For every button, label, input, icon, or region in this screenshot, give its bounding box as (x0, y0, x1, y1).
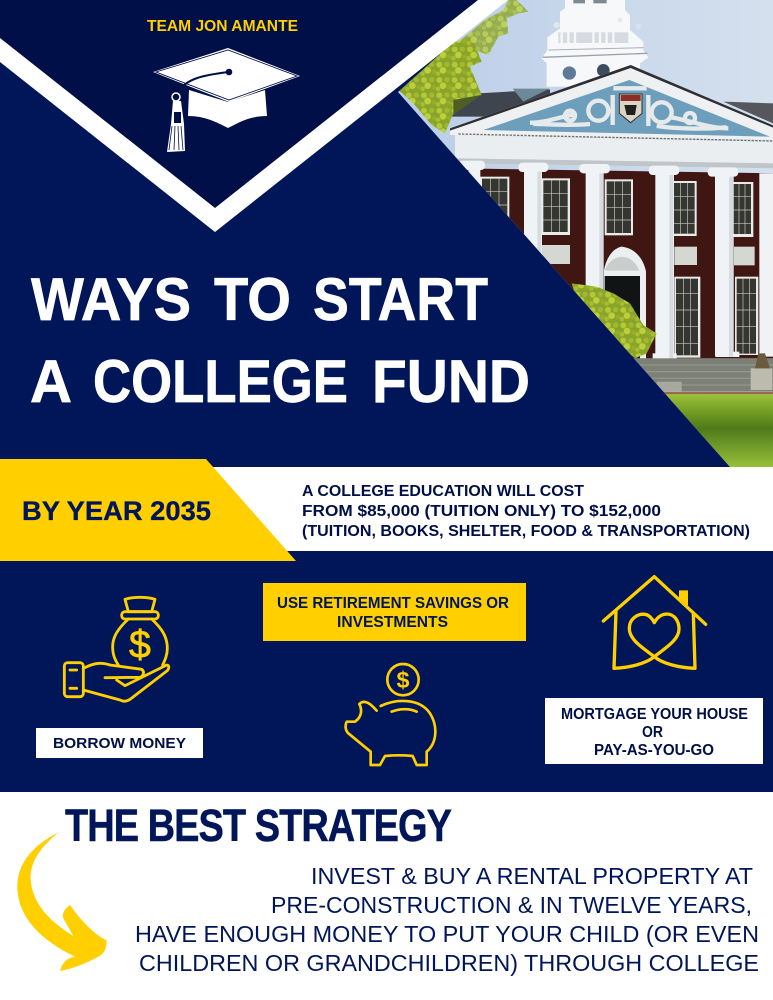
label: mortgage your house (545, 698, 763, 764)
icon: hand holding money bag: $ (129, 622, 151, 666)
title: FUND (372, 348, 530, 415)
cost text block (302, 483, 750, 540)
dark top triangle panel (0, 0, 478, 208)
label: team name: TEAM JON AMANTE (147, 18, 298, 35)
strategy text block: CHILDREN OR GRANDCHILDREN) THROUGH COLLEGE (139, 950, 759, 976)
icon: hand holding money bag (64, 597, 169, 701)
pediment (450, 65, 773, 140)
white chevron band (0, 0, 508, 232)
label: mortgage your house: PAY-AS-YOU-GO (594, 742, 714, 759)
icon: piggy bank with coin: $ (397, 667, 410, 693)
strategy text block (135, 863, 759, 976)
shrub (572, 283, 657, 358)
icon: graduation cap (153, 48, 300, 152)
lawn (666, 394, 773, 467)
door (604, 247, 646, 358)
columns (458, 161, 773, 359)
label: use retirement savings: USE RETIREMENT SAVINGS OR (277, 595, 509, 612)
banner text: BY YEAR 2035 (22, 496, 211, 526)
tree foliage top (397, 0, 528, 133)
entablature (455, 135, 773, 168)
band: white cost strip (200, 467, 773, 551)
strategy text block: HAVE ENOUGH MONEY TO PUT YOUR CHILD (OR EVEN (135, 921, 759, 947)
steps (623, 358, 773, 392)
pediment ornament (530, 88, 728, 129)
navy diagonal background (0, 0, 773, 551)
icon: house with heart (603, 577, 706, 668)
cost text block: (TUITION, BOOKS, SHELTER, FOOD & TRANSPORTATION) (302, 523, 750, 540)
label: borrow money: BORROW MONEY (53, 735, 186, 752)
title: WAYS (31, 266, 191, 333)
label: mortgage your house: MORTGAGE YOUR HOUSE (561, 706, 748, 723)
roofs (452, 89, 550, 117)
title (30, 266, 530, 415)
icon: piggy bank with coin (346, 664, 435, 765)
brick wall (462, 168, 773, 358)
strategy text block: PRE-CONSTRUCTION & IN TWELVE YEARS, (271, 892, 752, 918)
label: borrow money (36, 728, 203, 758)
navy options panel (0, 551, 773, 792)
cost text block: A COLLEGE EDUCATION WILL COST (302, 483, 584, 500)
label: use retirement savings (263, 583, 526, 641)
title: COLLEGE (93, 348, 348, 415)
label: use retirement savings: INVESTMENTS (337, 614, 448, 631)
title: A (30, 348, 72, 415)
strategy text block: INVEST & BUY A RENTAL PROPERTY AT (311, 863, 753, 889)
heading: the best strategy: THE BEST STRATEGY (65, 800, 452, 851)
photo: college building (390, 0, 773, 470)
icon: curved yellow arrow (17, 832, 107, 971)
banner: by year 2035 (0, 459, 296, 561)
label: mortgage your house: OR (642, 724, 663, 741)
title: TO (214, 266, 291, 333)
windows (480, 177, 758, 358)
title: START (313, 266, 488, 333)
tower (542, 0, 648, 87)
cost text block: FROM $85,000 (TUITION ONLY) TO $152,000 (302, 503, 661, 520)
